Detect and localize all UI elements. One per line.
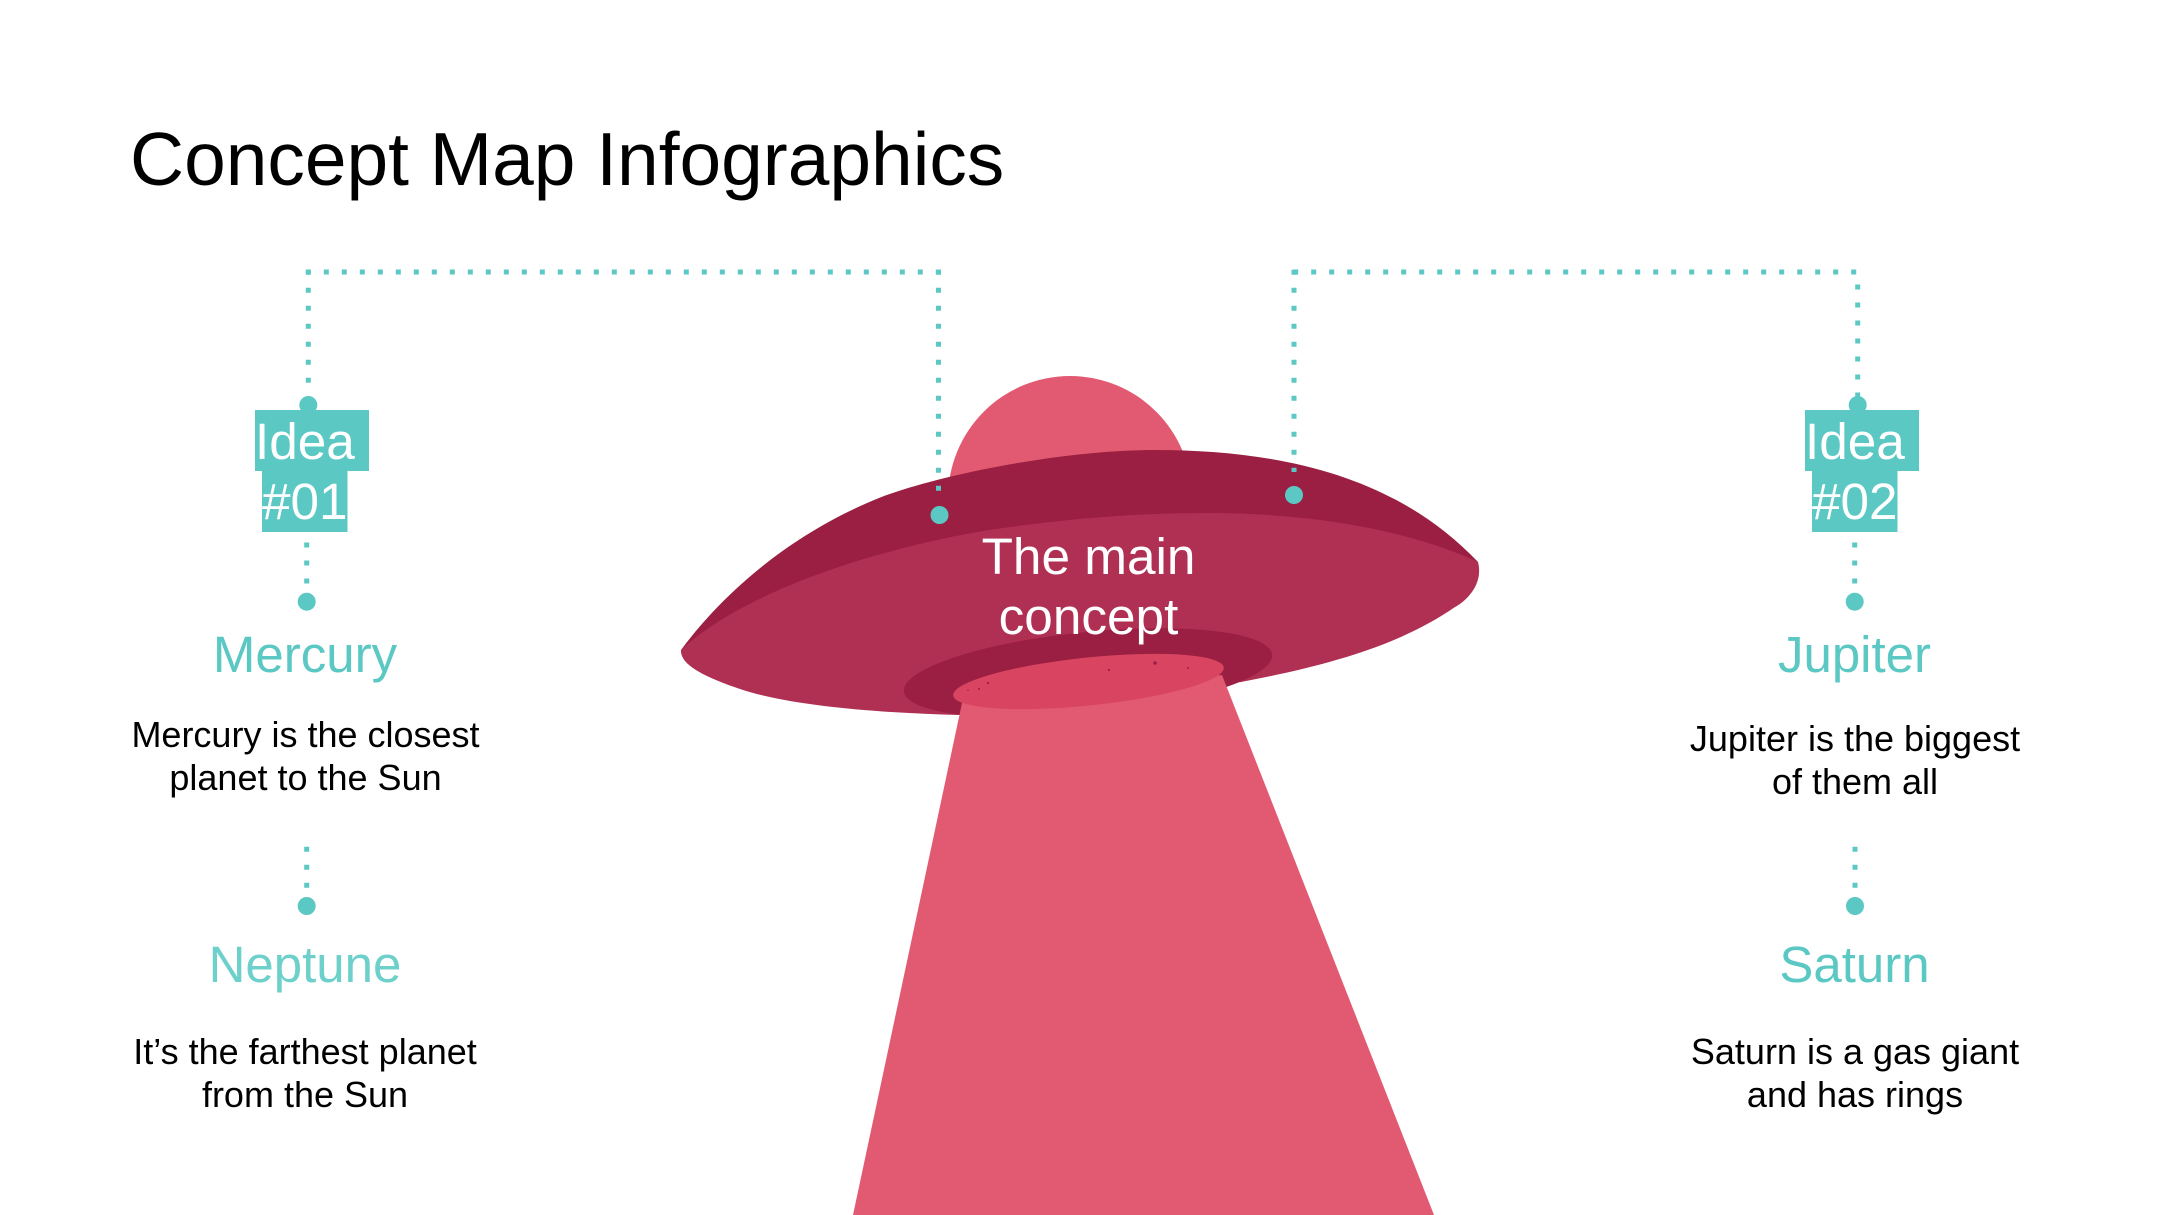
badge: Idea #02 [1805,410,1919,532]
text block: Neptune: from the Sun [202,1074,408,1115]
text block: Saturn [1691,936,2019,1115]
saucer underside ring [900,614,1276,732]
text block: Mercury [131,626,480,798]
badge: Idea #02: #02 [1812,473,1898,530]
light beam [853,675,1434,1215]
saucer upper dark band [681,450,1478,650]
main concept label: concept [999,588,1178,645]
badge: Idea #01: Idea [255,413,355,470]
text block: Jupiter [1690,626,2020,802]
connector: to Neptune [298,847,316,915]
beam opening ellipse [951,644,1226,719]
text block: Neptune: Neptune [209,936,401,993]
dotted connector: main concept to Idea 01 [299,270,948,524]
text block: Mercury: Mercury is the closest [131,714,480,755]
dotted connector: main concept to Idea 02 [1285,270,1867,504]
text block: Neptune [133,936,477,1115]
connector: Idea 01 to Mercury [298,542,316,611]
illustration: flying saucer with light beam [681,376,1479,1215]
title: Concept Map Infographics [130,117,1004,201]
connector: to Saturn [1846,847,1864,915]
main concept label [982,528,1195,645]
badge: Idea #01: #01 [262,473,348,530]
saucer body [681,513,1479,715]
text block: Jupiter: of them all [1772,761,1938,802]
main concept label: The main [982,528,1195,585]
text block: Mercury: Mercury [213,626,398,683]
connector: Idea 02 to Jupiter [1846,542,1864,611]
badge: Idea #02: Idea [1805,413,1905,470]
text block: Mercury: planet to the Sun [169,757,442,798]
text block: Neptune: It’s the farthest planet [133,1031,477,1072]
beam opening specks [967,661,1189,691]
text block: Jupiter: Jupiter [1778,626,1931,683]
text block: Saturn: and has rings [1747,1074,1963,1115]
text block: Saturn: Saturn [1779,936,1930,993]
text block: Jupiter: Jupiter is the biggest [1690,718,2020,759]
text block: Saturn: Saturn is a gas giant [1691,1031,2019,1072]
badge: Idea #01 [255,410,369,532]
saucer dome [948,376,1192,620]
